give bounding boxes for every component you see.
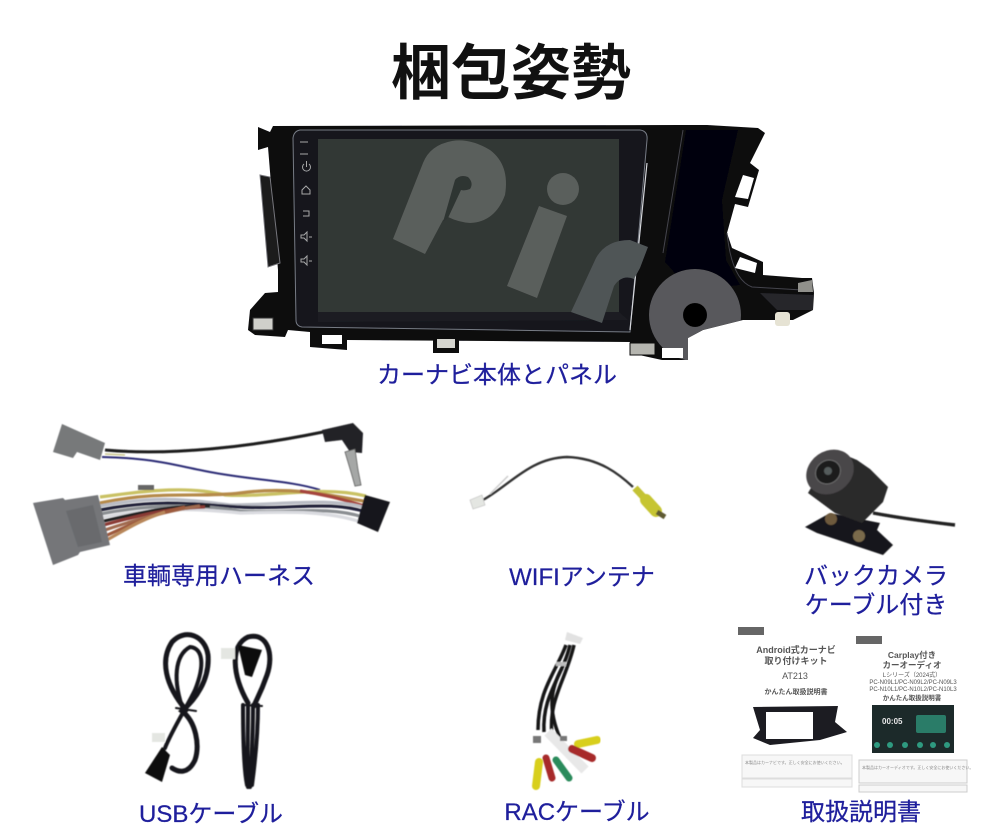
watermark o	[649, 269, 741, 361]
head unit screen	[872, 705, 954, 753]
cover tab	[738, 627, 764, 635]
bezel lower glare	[318, 312, 628, 322]
plug tip	[657, 512, 665, 517]
models one: PC-N09L1/PC-N09L2/PC-N09L3	[869, 680, 957, 686]
antenna cable	[105, 432, 323, 452]
cable ties	[176, 705, 262, 711]
cream end tab	[775, 312, 790, 326]
LCD	[318, 139, 619, 312]
green plug	[556, 760, 569, 778]
media card	[916, 715, 946, 733]
blue wire	[102, 457, 320, 490]
right dark wedge	[665, 130, 740, 290]
mount bracket	[805, 513, 893, 555]
status marks	[300, 142, 308, 154]
back icon	[303, 211, 309, 216]
harness wires	[100, 490, 368, 541]
series: Lシリーズ（2024式）	[883, 671, 941, 679]
lens highlight	[824, 467, 832, 475]
tape on wires	[138, 485, 154, 490]
bottom centre window	[437, 339, 455, 348]
cover tab	[856, 636, 882, 644]
label: harness: 車輌専用ハーネス	[123, 563, 315, 590]
back camera photo	[797, 440, 955, 555]
left connector	[145, 747, 170, 782]
title: 梱包姿勢	[391, 40, 631, 107]
white plug group	[548, 732, 585, 770]
label: RAC cable: RACケーブル	[504, 799, 650, 826]
label line two: ケーブル付き	[805, 592, 947, 619]
home icon	[302, 186, 310, 194]
panel opening	[766, 712, 813, 739]
screen bezel	[293, 130, 647, 332]
note box	[742, 755, 852, 778]
harness connector inset	[66, 505, 102, 547]
model: AT213	[782, 671, 808, 681]
harness end connector	[357, 495, 390, 532]
side icons	[300, 142, 312, 265]
yellow plug sleeve	[635, 488, 648, 502]
USB cable photo	[145, 635, 270, 787]
panel picture	[753, 706, 847, 745]
bottom right tab	[630, 343, 655, 355]
right end metal tab	[798, 280, 813, 292]
label: WIFI antenna: WIFIアンテナ	[509, 564, 655, 591]
watermark i dot	[547, 173, 579, 205]
cover title: Carplay付き	[888, 650, 936, 660]
right coil	[235, 636, 270, 706]
right strands	[243, 705, 258, 787]
note text: 本製品はカーオーディオです。正しく安全にお使いください。	[862, 764, 973, 770]
lens	[811, 455, 845, 489]
cover title two: カーオーディオ	[883, 660, 941, 670]
cables	[538, 645, 574, 738]
left clip	[260, 175, 280, 267]
label: unit and panel: カーナビ本体とパネル	[377, 362, 617, 389]
watermark	[393, 140, 741, 361]
white connector	[565, 632, 583, 644]
harness main connector	[33, 495, 110, 565]
camera body	[808, 450, 888, 523]
label line one: バックカメラ	[804, 563, 948, 590]
cable	[483, 457, 633, 500]
subtitle: かんたん取扱説明書	[883, 693, 942, 702]
antenna connector	[53, 424, 105, 460]
note box	[859, 760, 967, 783]
cover title: Android式カーナビ	[756, 644, 836, 655]
camera cable	[873, 513, 955, 525]
bezel highlight	[630, 163, 647, 330]
wiring harness photo	[33, 423, 390, 565]
thin white wire	[490, 476, 508, 494]
RAC cable photo	[533, 632, 597, 786]
watermark P counter	[443, 176, 472, 222]
note footer	[742, 779, 852, 787]
watermark i stem	[507, 206, 567, 298]
app icons	[874, 742, 950, 748]
watermark P	[393, 140, 506, 254]
WIFI antenna cable photo	[470, 457, 665, 517]
volume up icon	[301, 232, 312, 241]
bottom tab one window	[322, 335, 342, 344]
clock: 00:05	[882, 717, 903, 726]
note footer	[859, 785, 967, 792]
antenna plug	[322, 423, 363, 453]
note text: 本製品はカーナビです。正しく安全にお使いください。	[745, 759, 845, 765]
yellow plug body	[646, 500, 656, 511]
right lower reflection	[760, 293, 813, 310]
right white plug	[221, 648, 235, 659]
left coil inner	[165, 647, 201, 748]
red plug left	[546, 758, 552, 778]
bottom right window	[662, 348, 683, 358]
label: manual: 取扱説明書	[801, 799, 921, 826]
label: back camera	[804, 563, 948, 619]
bottom centre tab	[433, 337, 459, 353]
bolt	[825, 513, 837, 525]
camera front	[797, 440, 863, 504]
models two: PC-N10L1/PC-N10L2/PC-N10L3	[869, 687, 957, 693]
right bracket top window	[735, 175, 754, 199]
panel body	[248, 125, 814, 360]
right bracket lower window	[735, 257, 757, 273]
antenna pin	[345, 449, 361, 486]
right glossy reflection lines	[663, 130, 802, 290]
subtitle: かんたん取扱説明書	[764, 687, 828, 696]
power icon	[302, 161, 310, 171]
hole	[683, 303, 707, 327]
car navigation unit and panel photo	[248, 125, 814, 361]
yellow plug right	[578, 740, 597, 744]
bolt	[853, 530, 865, 542]
right connector	[238, 645, 262, 677]
red plug right	[572, 749, 592, 758]
yellow thin wire	[105, 454, 125, 455]
yellow plug left	[536, 762, 539, 786]
cover title two: 取り付けキット	[764, 655, 828, 666]
label: USB cable: USBケーブル	[139, 801, 283, 828]
left coil	[166, 635, 208, 771]
manual cover: installation kit	[738, 627, 852, 787]
watermark n	[571, 240, 648, 323]
volume down icon	[301, 256, 312, 265]
manual cover: carplay audio	[856, 636, 973, 792]
grey clips	[533, 736, 567, 743]
white tie	[556, 662, 566, 666]
left lower metal tab	[253, 318, 273, 330]
white connector	[470, 495, 485, 509]
left white plug	[152, 733, 165, 742]
